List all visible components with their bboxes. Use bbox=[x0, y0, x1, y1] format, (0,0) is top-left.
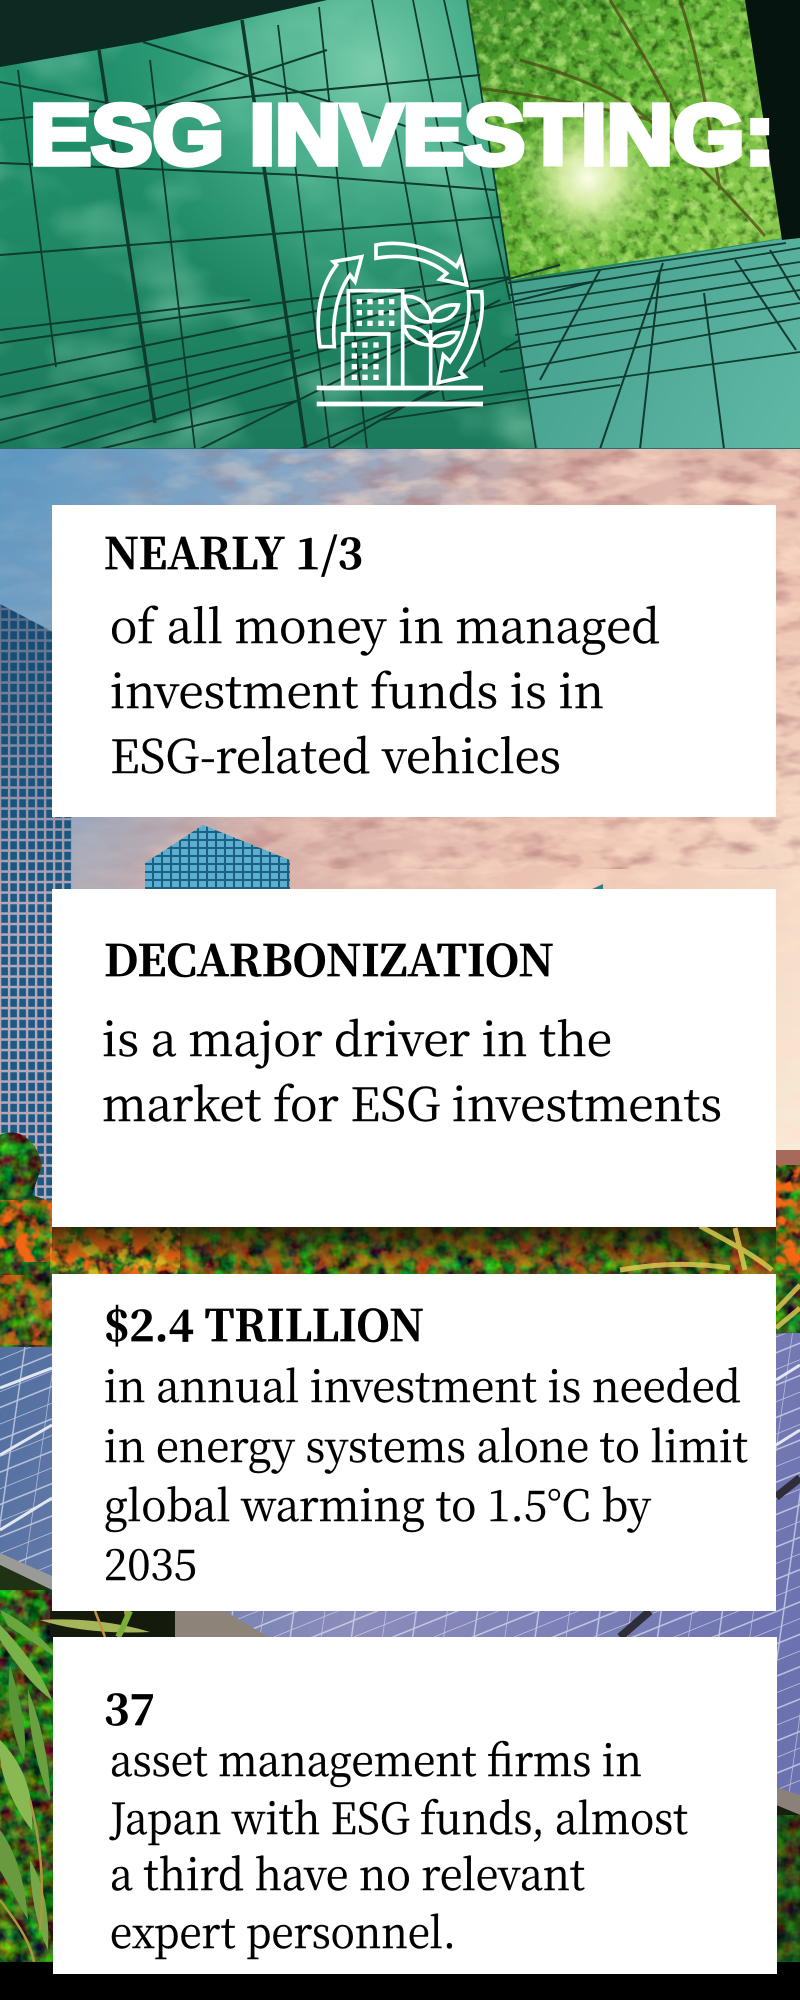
text: annual investment needed: 2035 bbox=[104, 1532, 197, 1593]
text: major driver: is a major driver in the bbox=[102, 1004, 612, 1070]
right lower glass roof bbox=[508, 236, 800, 449]
heading: nearly 1/3: NEARLY 1/3 bbox=[104, 521, 363, 582]
text: asset management firms: a third have no relevant bbox=[110, 1842, 585, 1903]
text: major driver: market for ESG investments bbox=[102, 1069, 722, 1135]
heading: 37: 37 bbox=[104, 1677, 155, 1738]
sky with clouds bbox=[0, 449, 800, 1169]
small blue building bbox=[145, 825, 290, 892]
text: asset management firms: expert personnel. bbox=[110, 1900, 456, 1961]
text: money in managed funds: of all money in managed bbox=[110, 591, 660, 657]
heading: decarbonization: DECARBONIZATION bbox=[104, 928, 554, 989]
text: annual investment needed: in annual investment is needed bbox=[104, 1354, 741, 1415]
title: ESG INVESTING: bbox=[30, 88, 775, 183]
text: asset management firms: Japan with ESG funds, almost bbox=[109, 1786, 688, 1847]
text: annual investment needed: global warming to 1.5°C by bbox=[104, 1473, 651, 1534]
left tower bbox=[0, 604, 72, 1215]
heading: $2.4 trillion: $2.4 TRILLION bbox=[104, 1293, 424, 1354]
text: annual investment needed: in energy systems alone to limit bbox=[104, 1414, 748, 1475]
header photo: green glass building and trees bbox=[0, 0, 800, 449]
text: asset management firms: asset management firms in bbox=[110, 1728, 642, 1789]
tree line foliage bbox=[0, 1128, 800, 1350]
right lower foliage bbox=[776, 1805, 800, 1962]
text: money in managed funds: ESG-related vehicles bbox=[110, 721, 561, 787]
text: money in managed funds: investment funds is in bbox=[110, 656, 604, 722]
text: money in managed funds bbox=[110, 591, 660, 787]
bamboo foliage bbox=[0, 1565, 175, 1962]
glass grid lines bbox=[0, 0, 800, 449]
panel: 2.4 trillion bbox=[52, 1274, 776, 1611]
panel: decarbonization bbox=[52, 889, 776, 1227]
text: major driver bbox=[102, 1004, 722, 1135]
bottom black band bbox=[0, 1962, 800, 2000]
tree canopy behind building bbox=[468, 0, 782, 280]
icon: building with plant in recycling arrows bbox=[317, 243, 483, 404]
text: asset management firms bbox=[109, 1728, 688, 1961]
background photo: sky, towers, trees and solar panels bbox=[0, 449, 800, 1962]
panel: nearly one third bbox=[52, 505, 776, 817]
text: annual investment needed bbox=[104, 1354, 748, 1593]
panel: 37 firms bbox=[53, 1637, 777, 1974]
solar panels bbox=[0, 1333, 800, 1815]
